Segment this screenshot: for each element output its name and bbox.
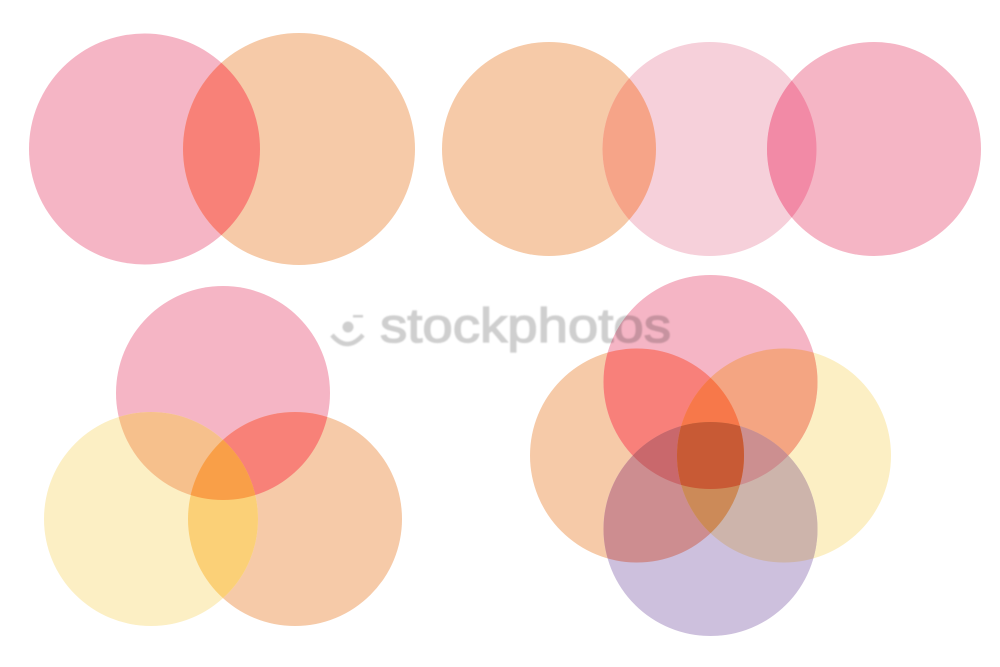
icon: watermark logo bbox=[332, 315, 363, 344]
four-circle diagram bbox=[530, 275, 891, 636]
watermark bbox=[332, 300, 671, 353]
three-circle chain diagram bbox=[442, 42, 981, 256]
two-circle diagram bbox=[29, 33, 415, 265]
watermark text: stockphotos bbox=[380, 300, 671, 353]
three-circle triangle diagram bbox=[44, 286, 402, 626]
